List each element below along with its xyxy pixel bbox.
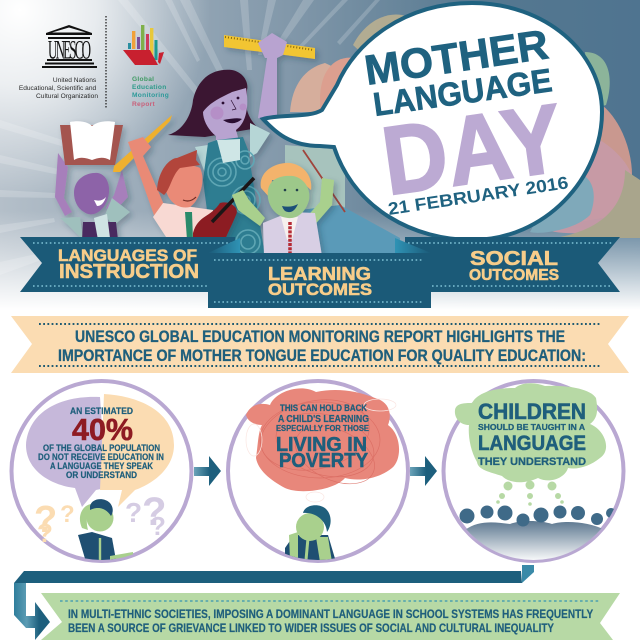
cloud text: LANGUAGE xyxy=(478,432,586,455)
page background xyxy=(0,0,640,310)
vest xyxy=(82,222,118,240)
figure: boy with pencil and violin xyxy=(113,115,254,240)
dress spirals xyxy=(208,151,260,254)
statistic text: OF THE GLOBAL POPULATION xyxy=(43,443,160,453)
question marks: ? xyxy=(37,518,53,548)
question marks: ? xyxy=(150,511,166,541)
crowd bodies xyxy=(465,521,605,562)
scribble xyxy=(254,390,384,495)
figure: girl with ruler xyxy=(168,33,315,256)
ribbon label: INSTRUCTION xyxy=(59,261,199,283)
shirt xyxy=(94,214,110,240)
title xyxy=(361,20,570,219)
arrow: panel two to three xyxy=(410,456,437,486)
cloud text xyxy=(276,403,369,472)
smile xyxy=(94,197,106,206)
cloud text: A CHILD'S LEARNING xyxy=(278,414,369,425)
person xyxy=(285,505,336,562)
question marks: ? xyxy=(142,490,166,534)
statistic text: 40% xyxy=(72,412,133,447)
collar and tie xyxy=(281,217,298,240)
face detail xyxy=(183,197,196,201)
ribbon: social outcomes xyxy=(405,237,620,292)
arms xyxy=(232,178,334,228)
arrow: panel one to two xyxy=(194,456,221,486)
head xyxy=(268,176,309,218)
report name: Monitoring xyxy=(132,92,169,99)
eyes xyxy=(284,189,298,191)
arms xyxy=(55,153,128,216)
panel: poverty xyxy=(228,381,408,562)
cream headline banner xyxy=(11,316,629,373)
cloud text: ESPECIALLY FOR THOSE xyxy=(276,423,369,433)
arm xyxy=(128,137,165,218)
ribbon label: OUTCOMES xyxy=(268,280,372,299)
title line: day: DAY xyxy=(376,83,569,216)
statistic text: A LANGUAGE THEY SPEAK xyxy=(50,461,154,471)
temple roof xyxy=(46,25,92,35)
question marks: ? xyxy=(34,499,57,541)
speech bubble xyxy=(263,3,602,240)
report name: Global xyxy=(132,76,154,83)
hair xyxy=(261,163,311,198)
book xyxy=(60,125,123,165)
smile xyxy=(282,204,298,212)
question marks: ? xyxy=(60,501,75,528)
tie xyxy=(185,212,193,240)
dotted divider xyxy=(105,16,107,108)
dress xyxy=(203,137,265,256)
title line: language: LANGUAGE xyxy=(371,61,554,123)
confused person xyxy=(78,499,133,562)
report name: Report xyxy=(132,101,156,108)
face xyxy=(203,88,247,145)
pencil xyxy=(113,115,172,172)
sleeves xyxy=(195,123,270,173)
head xyxy=(74,173,109,214)
panel: children xyxy=(444,381,624,562)
ruler xyxy=(224,35,315,59)
violin xyxy=(193,202,237,240)
report name: Education xyxy=(132,84,167,91)
organisation name: Cultural Organization xyxy=(36,93,98,100)
pale thought scribble xyxy=(246,399,396,502)
question marks xyxy=(34,490,166,548)
cloud text: POVERTY xyxy=(279,450,369,472)
ribbon label: LANGUAGES OF xyxy=(58,246,197,265)
shirt xyxy=(153,203,214,240)
panel: 40 percent xyxy=(12,381,192,562)
organisation name: United Nations xyxy=(53,77,97,84)
figure: green boy xyxy=(232,163,334,256)
shirt xyxy=(263,212,322,256)
cream speech bubble xyxy=(100,394,174,507)
GEM report logo xyxy=(123,25,171,108)
green thought cloud xyxy=(455,383,606,482)
ribbon label: OUTCOMES xyxy=(469,267,559,284)
title line: mother: MOTHER xyxy=(361,20,551,94)
coloured bars xyxy=(128,25,158,60)
figure: boy with book xyxy=(55,121,130,240)
coloured blobs behind speech bubble xyxy=(262,14,640,255)
statistic text: DO NOT RECEIVE EDUCATION IN xyxy=(38,452,164,462)
question marks: ? xyxy=(125,497,142,528)
hair xyxy=(168,70,258,137)
red folder xyxy=(123,50,164,65)
cloud text: SHOULD BE TAUGHT IN A xyxy=(478,422,585,432)
head xyxy=(164,166,202,207)
cloud text: CHILDREN xyxy=(478,399,586,424)
lilac speech bubble xyxy=(26,397,106,507)
cheeks and smile xyxy=(210,97,246,123)
cloud text xyxy=(478,399,586,468)
date: 21 FEBRUARY 2016 xyxy=(387,172,570,219)
ribbon label: LEARNING xyxy=(268,264,371,284)
collar xyxy=(217,139,240,163)
UNESCO logo xyxy=(19,25,98,100)
headline text: UNESCO GLOBAL EDUCATION MONITORING REPORT HIGHLIGHTS THE xyxy=(75,328,565,346)
banner text: BEEN A SOURCE OF GRIEVANCE LINKED TO WIDER ISSUES OF SOCIAL AND CULTURAL INEQUALITY xyxy=(68,623,554,635)
crowd heads xyxy=(460,506,616,526)
cloud text: THEY UNDERSTAND xyxy=(478,456,586,468)
raised arm xyxy=(258,33,287,125)
statistic text: OR UNDERSTAND xyxy=(66,470,137,480)
statistic text xyxy=(38,406,164,480)
organisation name: Educational, Scientific and xyxy=(19,85,96,92)
UNESCO logo: UNESCO xyxy=(48,37,91,65)
statistic text: AN ESTIMATED xyxy=(70,406,133,416)
salmon thought cloud xyxy=(246,388,399,491)
hair xyxy=(157,150,200,195)
ribbon: languages of instruction xyxy=(20,237,235,292)
thought dots xyxy=(496,480,564,506)
cloud text: LIVING IN xyxy=(276,434,367,456)
cloud text: THIS CAN HOLD BACK xyxy=(280,403,367,413)
connector arrow to bottom banner xyxy=(14,565,534,640)
sleeves xyxy=(60,198,130,240)
green conclusion banner xyxy=(41,593,620,640)
ribbon label: SOCIAL xyxy=(470,248,558,270)
ribbon: learning outcomes xyxy=(208,238,431,308)
